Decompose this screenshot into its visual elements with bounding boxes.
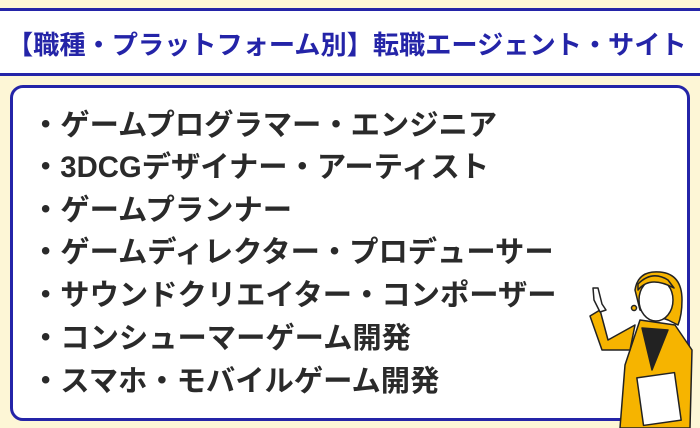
item 2: ・3DCGデザイナー・アーティスト — [31, 151, 489, 184]
item 7: ・スマホ・モバイルゲーム開発 — [31, 365, 439, 398]
icon: woman pointing — [589, 271, 693, 428]
item 6: ・コンシューマーゲーム開発 — [31, 322, 411, 355]
title: 【職種・プラットフォーム別】転職エージェント・サイト — [7, 30, 687, 60]
item 1: ・ゲームプログラマー・エンジニア — [31, 109, 497, 142]
item 4: ・ゲームディレクター・プロデューサー — [31, 236, 554, 269]
panel: job list — [10, 85, 690, 421]
item 5: ・サウンドクリエイター・コンポーザー — [31, 279, 557, 312]
item 3: ・ゲームプランナー — [31, 194, 292, 227]
header band — [0, 8, 700, 76]
